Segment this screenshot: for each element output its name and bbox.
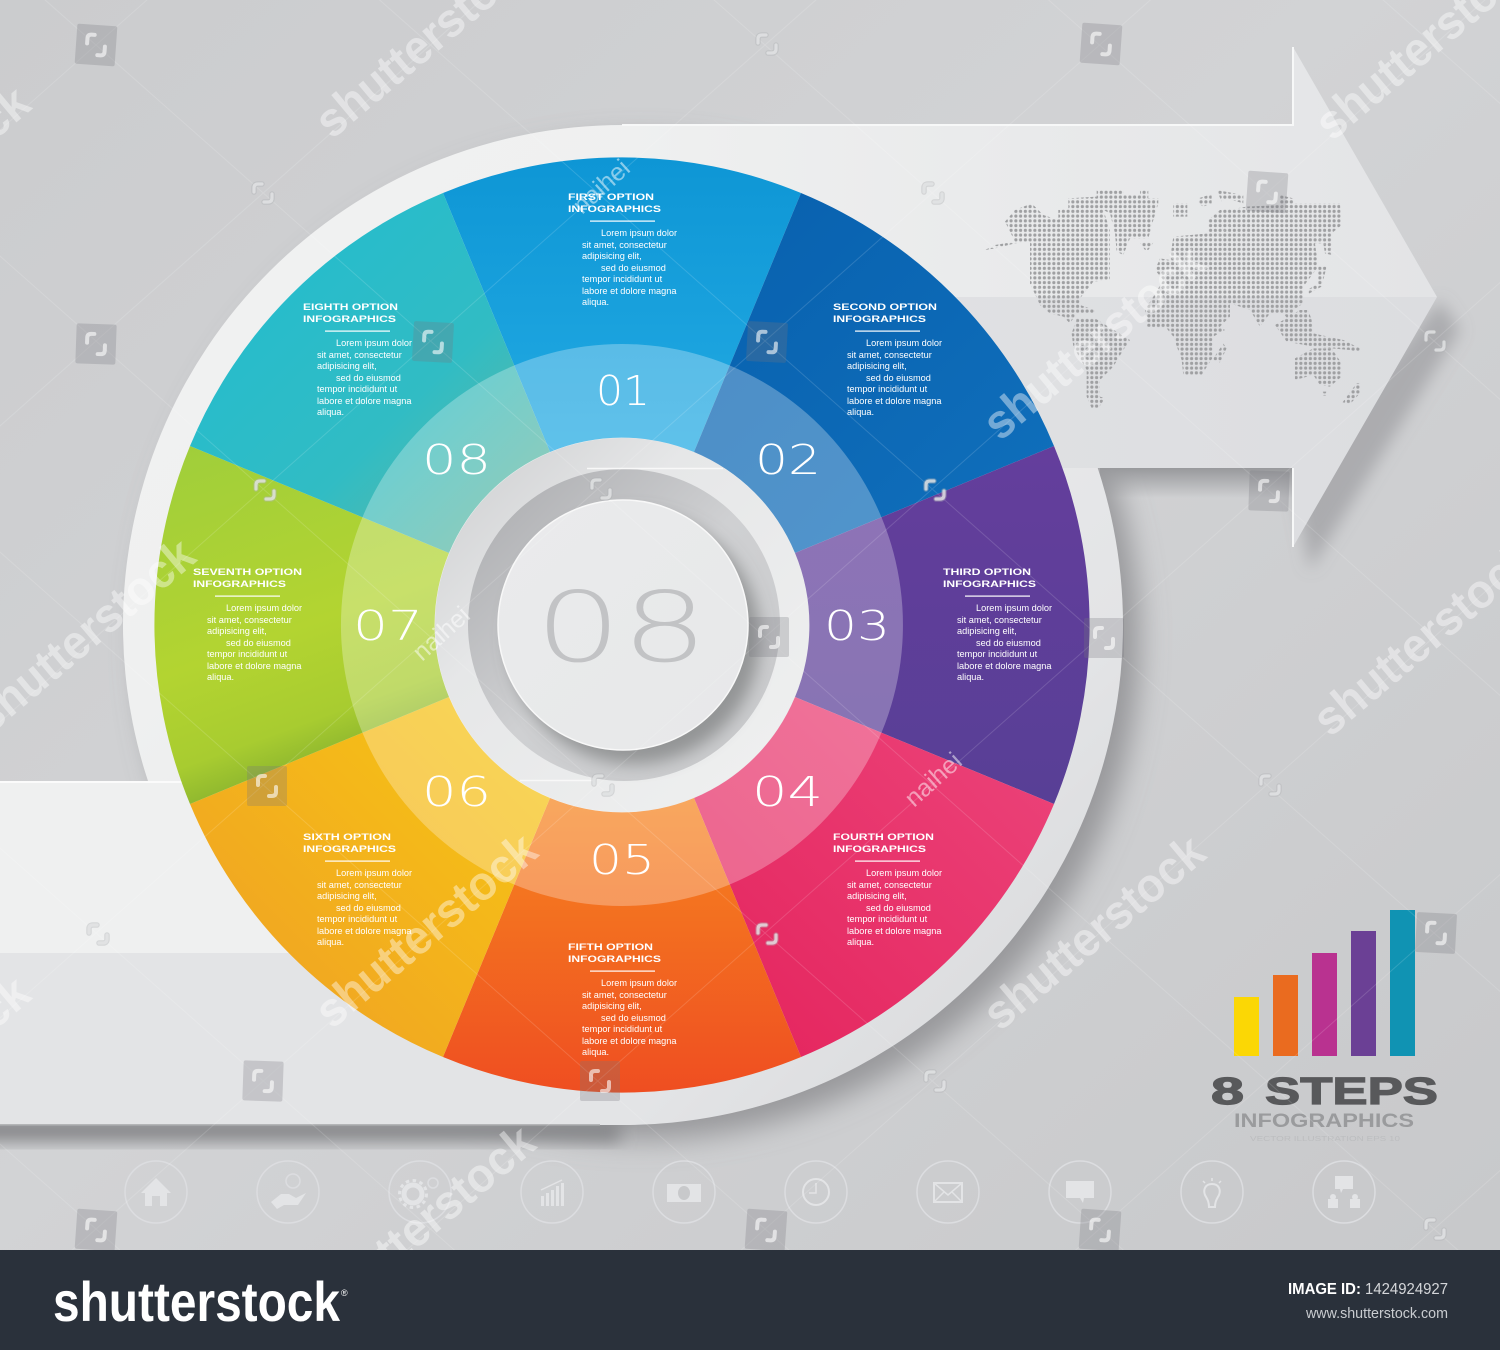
text: first option: adipisicing elit, — [582, 251, 642, 261]
text: fourth option: aliqua. — [847, 937, 874, 947]
text: sixth option: tempor incididunt ut — [317, 914, 398, 924]
text: seventh option: INFOGRAPHICS — [193, 579, 287, 590]
outer white ring — [123, 125, 1123, 1125]
text: second option: tempor incididunt ut — [847, 384, 928, 394]
text: first option: aliqua. — [582, 297, 609, 307]
text: first option: sit amet, consectetur — [582, 240, 667, 250]
text: sixth option: labore et dolore magna — [317, 926, 412, 936]
text: fifth option — [568, 942, 677, 1057]
website: www.shutterstock.com — [1305, 1306, 1448, 1322]
icon: growth chart — [521, 1161, 583, 1223]
footer bar — [0, 1250, 1500, 1350]
text: eighth option: adipisicing elit, — [317, 361, 377, 371]
text: sixth option: aliqua. — [317, 937, 344, 947]
watermark words: naihei — [567, 154, 636, 219]
text: third option — [943, 567, 1052, 682]
icon: banknote — [653, 1161, 715, 1223]
text: seventh option: SEVENTH OPTION — [193, 567, 302, 578]
footer bar: ® — [341, 1288, 348, 1298]
step numbers: 06 — [422, 768, 491, 816]
text: first option: labore et dolore magna — [582, 286, 677, 296]
hub — [435, 438, 809, 812]
hub disc — [498, 500, 748, 750]
text: seventh option: tempor incididunt ut — [207, 649, 288, 659]
text: seventh option — [193, 567, 302, 682]
text: sixth option — [303, 832, 412, 947]
text: fourth option: labore et dolore magna — [847, 926, 942, 936]
watermark words: shutterstock — [305, 823, 548, 1038]
text: fourth option — [833, 832, 942, 947]
text: fourth option: Lorem ipsum dolor — [866, 868, 942, 878]
hub recess — [468, 469, 780, 781]
hub number: 08 — [535, 571, 708, 684]
watermark words: shutterstock — [973, 235, 1216, 450]
text: third option: sed do eiusmod — [976, 638, 1041, 648]
step numbers: 08 — [422, 436, 491, 484]
icon: gears — [389, 1161, 451, 1223]
text: sixth option: sit amet, consectetur — [317, 880, 402, 890]
text: first option: sed do eiusmod — [601, 263, 666, 273]
text: eighth option: sit amet, consectetur — [317, 350, 402, 360]
text: seventh option: sed do eiusmod — [226, 638, 291, 648]
watermark words: shutterstock — [973, 825, 1216, 1040]
text: third option: labore et dolore magna — [957, 661, 1052, 671]
watermark words: naihei — [899, 747, 968, 812]
text: second option — [833, 302, 942, 417]
recess shadow — [508, 512, 760, 764]
segment 06 — [190, 697, 550, 1057]
text: fifth option: sed do eiusmod — [601, 1013, 666, 1023]
hub outer circle — [435, 438, 809, 812]
text: second option: sit amet, consectetur — [847, 350, 932, 360]
icon: hand with coin — [257, 1161, 319, 1223]
step numbers: 02 — [755, 436, 821, 484]
text: third option: tempor incididunt ut — [957, 649, 1038, 659]
text: seventh option: adipisicing elit, — [207, 626, 267, 636]
step numbers: 05 — [589, 836, 655, 884]
text: second option: Lorem ipsum dolor — [866, 338, 942, 348]
bar chart logo — [1234, 910, 1415, 1056]
text: first option: INFOGRAPHICS — [568, 204, 662, 215]
text: eighth option: labore et dolore magna — [317, 396, 412, 406]
text: second option: labore et dolore magna — [847, 396, 942, 406]
text: sixth option: adipisicing elit, — [317, 891, 377, 901]
text: third option: THIRD OPTION — [943, 567, 1031, 578]
text: second option: sed do eiusmod — [866, 373, 931, 383]
text: fifth option: Lorem ipsum dolor — [601, 978, 677, 988]
icon: clock — [785, 1161, 847, 1223]
segment 05 — [443, 798, 801, 1093]
text: eighth option: Lorem ipsum dolor — [336, 338, 412, 348]
wheel of eight segments — [154, 157, 1090, 1093]
text: fifth option: INFOGRAPHICS — [568, 954, 662, 965]
text: fourth option: sit amet, consectetur — [847, 880, 932, 890]
text: sixth option: SIXTH OPTION — [303, 832, 391, 843]
text: seventh option: labore et dolore magna — [207, 661, 302, 671]
text: fifth option: sit amet, consectetur — [582, 990, 667, 1000]
text: third option: sit amet, consectetur — [957, 615, 1042, 625]
logo title: VECTOR ILLUSTRATION EPS 10 — [1250, 1134, 1400, 1143]
text: eighth option: tempor incididunt ut — [317, 384, 398, 394]
text: fifth option: tempor incididunt ut — [582, 1024, 663, 1034]
text: sixth option: sed do eiusmod — [336, 903, 401, 913]
text: fourth option: INFOGRAPHICS — [833, 844, 927, 855]
segment 03 — [795, 446, 1090, 804]
translucent inner band — [341, 344, 903, 906]
arrow — [622, 47, 1437, 547]
text: third option: adipisicing elit, — [957, 626, 1017, 636]
logo title: STEPS — [1265, 1071, 1438, 1113]
text: fourth option: adipisicing elit, — [847, 891, 907, 901]
text: eighth option: sed do eiusmod — [336, 373, 401, 383]
text: first option: FIRST OPTION — [568, 192, 654, 203]
left incoming band — [0, 781, 640, 1126]
step numbers: 03 — [824, 602, 890, 650]
text: sixth option: INFOGRAPHICS — [303, 844, 397, 855]
text: first option: Lorem ipsum dolor — [601, 228, 677, 238]
logo title: INFOGRAPHICS — [1234, 1111, 1414, 1132]
segment 07 — [154, 446, 449, 804]
step numbers — [353, 367, 890, 884]
text: first option: tempor incididunt ut — [582, 274, 663, 284]
image id: IMAGE ID: 1424924927 — [1288, 1281, 1448, 1298]
text: seventh option: sit amet, consectetur — [207, 615, 292, 625]
text: second option: aliqua. — [847, 407, 874, 417]
bottom icon row — [125, 1161, 1375, 1223]
step numbers: 07 — [353, 602, 423, 650]
text: third option: aliqua. — [957, 672, 984, 682]
text: seventh option: Lorem ipsum dolor — [226, 603, 302, 613]
text: eighth option: INFOGRAPHICS — [303, 314, 397, 325]
icon: home — [125, 1161, 187, 1223]
text: eighth option — [303, 302, 412, 417]
text: first option — [568, 192, 677, 307]
text: eighth option: aliqua. — [317, 407, 344, 417]
text: third option: Lorem ipsum dolor — [976, 603, 1052, 613]
ring drop shadow — [0, 140, 1460, 1142]
footer logo: shutterstock — [53, 1270, 341, 1333]
icon: people talking — [1313, 1161, 1375, 1223]
text: fifth option: adipisicing elit, — [582, 1001, 642, 1011]
segment 04 — [694, 697, 1054, 1057]
icon: speech bubble — [1049, 1161, 1111, 1223]
text: third option: INFOGRAPHICS — [943, 579, 1037, 590]
text: fourth option: sed do eiusmod — [866, 903, 931, 913]
icon: light bulb — [1181, 1161, 1243, 1223]
watermark words: naihei — [407, 601, 476, 666]
step numbers: 01 — [596, 367, 650, 415]
segment 02 — [694, 193, 1054, 553]
text: fifth option: FIFTH OPTION — [568, 942, 653, 953]
segment 01 — [443, 157, 801, 452]
logo title: 8 — [1211, 1071, 1244, 1113]
step numbers: 04 — [752, 768, 823, 816]
segment 08 — [190, 193, 550, 553]
text: seventh option: aliqua. — [207, 672, 234, 682]
text: fifth option: aliqua. — [582, 1047, 609, 1057]
text: second option: INFOGRAPHICS — [833, 314, 927, 325]
icon: envelope — [917, 1161, 979, 1223]
world map — [980, 185, 1365, 415]
text: fourth option: tempor incididunt ut — [847, 914, 928, 924]
text: sixth option: Lorem ipsum dolor — [336, 868, 412, 878]
watermark words: shutterstock — [303, 1115, 546, 1330]
text: fourth option: FOURTH OPTION — [833, 832, 934, 843]
text: eighth option: EIGHTH OPTION — [303, 302, 398, 313]
text: second option: adipisicing elit, — [847, 361, 907, 371]
text: second option: SECOND OPTION — [833, 302, 937, 313]
logo title — [1211, 1071, 1438, 1143]
text: fifth option: labore et dolore magna — [582, 1036, 677, 1046]
